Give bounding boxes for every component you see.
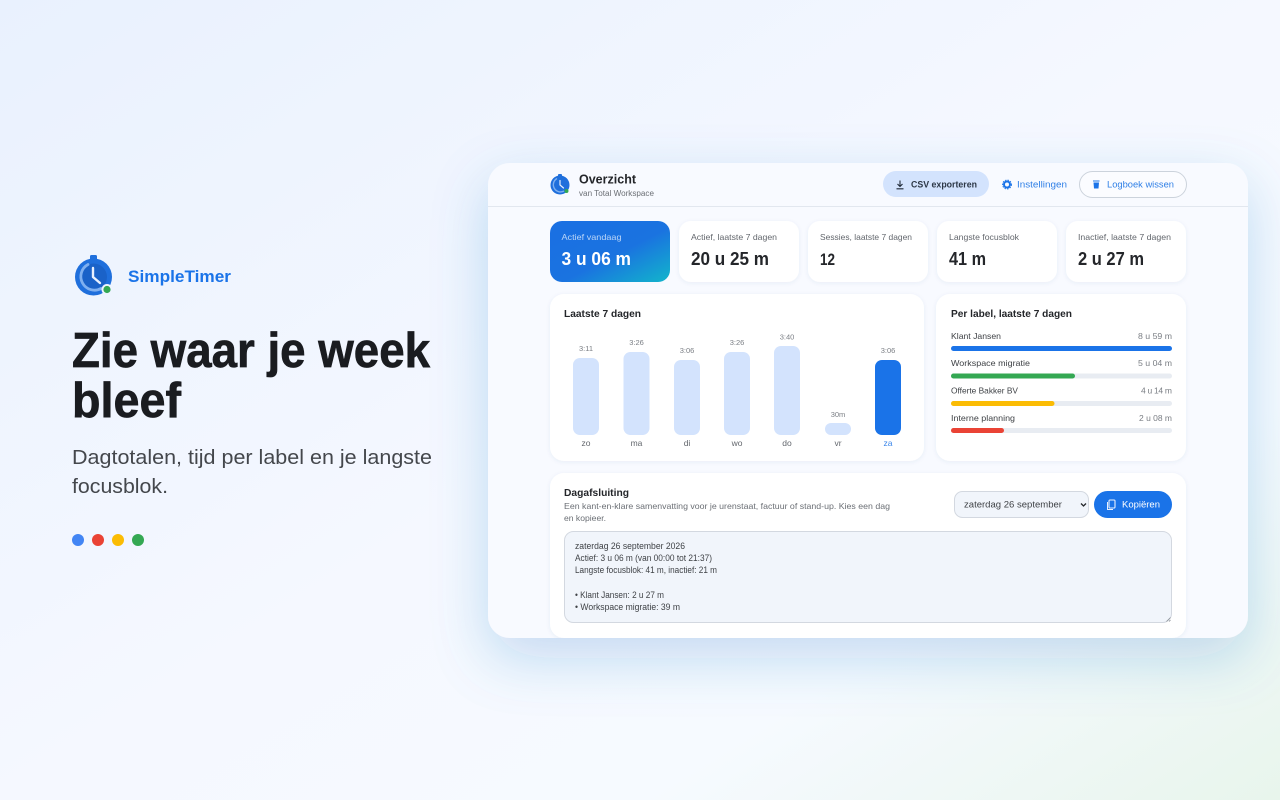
panel heading: Laatste 7 dagen: [564, 308, 641, 320]
summary text area: [564, 532, 1172, 622]
bar chart: wo: [731, 438, 743, 448]
headline: bleef: [72, 374, 182, 428]
headline: [72, 324, 431, 428]
stat card: Actief, laatste 7 dagen: Actief, laatste 7 dagen: [691, 232, 777, 242]
panel description: [564, 503, 890, 522]
subtitle: focusblok.: [72, 475, 168, 498]
bar chart: [573, 332, 901, 448]
stat card: Inactief, laatste 7 dagen: Inactief, laatste 7 dagen: [1078, 232, 1171, 242]
button: Instellingen: Instellingen: [1017, 180, 1067, 190]
label row: Offerte Bakker BV: 4 u 14 m: [1141, 386, 1172, 396]
date select: zaterdag 26 september: [964, 500, 1062, 510]
summary text area: • Workspace migratie: 39 m: [575, 602, 680, 612]
headline: Zie waar je week: [72, 324, 431, 378]
bar chart: 3:06: [881, 346, 895, 355]
app window content: [488, 171, 1248, 638]
label row: Workspace migratie: Workspace migratie: [951, 358, 1030, 368]
app window background: [488, 163, 1248, 638]
colour dots: [72, 534, 144, 546]
date select: [954, 492, 1088, 518]
bar chart: vr: [834, 438, 842, 448]
summary text area: Langste focusblok: 41 m, inactief: 21 m: [575, 565, 717, 575]
header subtitle: van Total Workspace: [579, 189, 655, 198]
label row: Klant Jansen: 8 u 59 m: [1138, 331, 1172, 341]
brand: logo and name: [75, 255, 232, 296]
stat card: Actief, laatste 7 dagen: [678, 234, 800, 284]
bar chart: 3:26: [730, 338, 744, 347]
button: Logboek wissen: [1080, 172, 1186, 198]
label row: Offerte Bakker BV: Offerte Bakker BV: [951, 386, 1018, 396]
panel description: Een kant-en-klare samenvatting voor je urenstaat, factuur of stand-up. Kies een dag: [564, 501, 890, 511]
stat card: Actief vandaag: 3 u 06 m: [562, 249, 631, 269]
label row: Workspace migratie: [951, 358, 1172, 378]
button: Kopiëren: [1094, 491, 1172, 518]
button: Kopiëren: Kopiëren: [1122, 500, 1160, 510]
label row: Workspace migratie: 5 u 04 m: [1138, 358, 1172, 368]
bar chart: 3:06: [680, 346, 694, 355]
stat card: Actief vandaag: [550, 221, 670, 282]
bar chart: 30m: [831, 410, 845, 419]
bar chart: zo: [582, 438, 591, 448]
stat card: Sessies, laatste 7 dagen: Sessies, laatste 7 dagen: [820, 232, 912, 242]
icon: header stopwatch: [550, 174, 570, 194]
stat card: Langste focusblok: [936, 234, 1058, 284]
summary text area: Actief: 3 u 06 m (van 00:00 tot 21:37): [575, 553, 712, 563]
subtitle: [72, 446, 432, 498]
bar chart: di: [684, 438, 690, 448]
panel: Dagafsluiting: [550, 473, 1186, 638]
panel description: en kopieer.: [564, 513, 606, 523]
button: CSV exporteren: [883, 171, 989, 197]
summary text area: • Klant Jansen: 2 u 27 m: [575, 590, 664, 600]
icon: SimpleTimer stopwatch logo: [75, 255, 112, 296]
stat card: Sessies, laatste 7 dagen: [808, 234, 928, 284]
bar chart: 3:40: [780, 332, 794, 342]
stat card: Inactief, laatste 7 dagen: [1066, 234, 1186, 284]
panel heading: Dagafsluiting: [564, 487, 629, 499]
bar chart: do: [782, 438, 792, 448]
label row: Offerte Bakker BV: [951, 386, 1172, 406]
bar chart: za: [884, 438, 893, 448]
button: Logboek wissen: Logboek wissen: [1107, 180, 1174, 190]
stat card: Sessies, laatste 7 dagen: 12: [820, 250, 835, 269]
label row: Interne planning: Interne planning: [951, 413, 1015, 423]
app header: [488, 171, 1248, 206]
summary text area: zaterdag 26 september 2026: [575, 541, 685, 551]
label row: Interne planning: 2 u 08 m: [1139, 413, 1172, 423]
panel: Per label, laatste 7 dagen: [936, 294, 1186, 461]
label row: Klant Jansen: [951, 331, 1172, 351]
subtitle: Dagtotalen, tijd per label en je langste: [72, 446, 432, 469]
bar chart: 3:26: [629, 338, 644, 347]
label row: Klant Jansen: Klant Jansen: [951, 331, 1001, 341]
stat card: Langste focusblok: 41 m: [949, 249, 986, 269]
bar chart: ma: [631, 438, 643, 448]
stat card: Inactief, laatste 7 dagen: 2 u 27 m: [1078, 249, 1144, 269]
bar chart: 3:11: [579, 344, 593, 353]
panel: Laatste 7 dagen: [550, 294, 924, 461]
label row: Interne planning: [951, 413, 1172, 433]
stat card: Langste focusblok: Langste focusblok: [949, 232, 1020, 242]
stat card: Actief vandaag: Actief vandaag: [562, 232, 622, 242]
stat card: Actief, laatste 7 dagen: 20 u 25 m: [691, 249, 769, 269]
button: CSV exporteren: CSV exporteren: [911, 180, 977, 190]
panel heading: Per label, laatste 7 dagen: [951, 308, 1072, 320]
header title: Overzicht: [579, 172, 637, 186]
brand name: SimpleTimer: [128, 268, 232, 286]
